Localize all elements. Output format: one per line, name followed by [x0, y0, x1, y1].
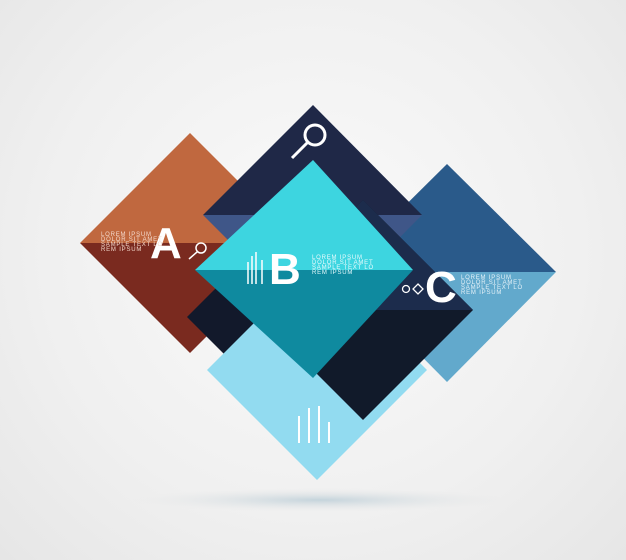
- panel: right dark diamond: [253, 200, 473, 420]
- panel: C diamond: [338, 164, 556, 382]
- text block: A: LOREM IPSUM: [101, 232, 152, 238]
- text block: B: SAMPLE TEXT LO: [312, 265, 374, 271]
- heading: A: A: [150, 219, 182, 268]
- text block: B: DOLOR SIT AMET: [312, 260, 373, 266]
- text block: C: REM IPSUM: [461, 290, 502, 296]
- icon: bars left of B: [248, 252, 262, 284]
- panel: bottom light blue diamond: [207, 260, 427, 480]
- text block: A: REM IPSUM: [101, 247, 142, 253]
- icon: circle and diamond C: [402, 284, 423, 294]
- icon: bars bottom: [299, 406, 329, 443]
- panel: A diamond: [80, 133, 300, 353]
- heading: C: C: [425, 263, 457, 312]
- text block: C: SAMPLE TEXT LO: [461, 285, 523, 291]
- heading: B: B: [269, 245, 301, 294]
- text block: A: DOLOR SIT AMET: [101, 237, 162, 243]
- text block: B: LOREM IPSUM: [312, 255, 363, 261]
- icon: magnifier top: [292, 125, 325, 158]
- text block: A: SAMPLE TEXT LO: [101, 242, 163, 248]
- panel: left dark diamond: [187, 207, 407, 427]
- floor shadow: [130, 488, 510, 512]
- panel: B cyan diamond: [195, 160, 413, 378]
- panel: top navy diamond: [203, 105, 422, 325]
- text block: C: LOREM IPSUM: [461, 275, 512, 281]
- text block: B: REM IPSUM: [312, 270, 353, 276]
- text block: C: DOLOR SIT AMET: [461, 280, 522, 286]
- icon: magnifier A: [189, 243, 206, 259]
